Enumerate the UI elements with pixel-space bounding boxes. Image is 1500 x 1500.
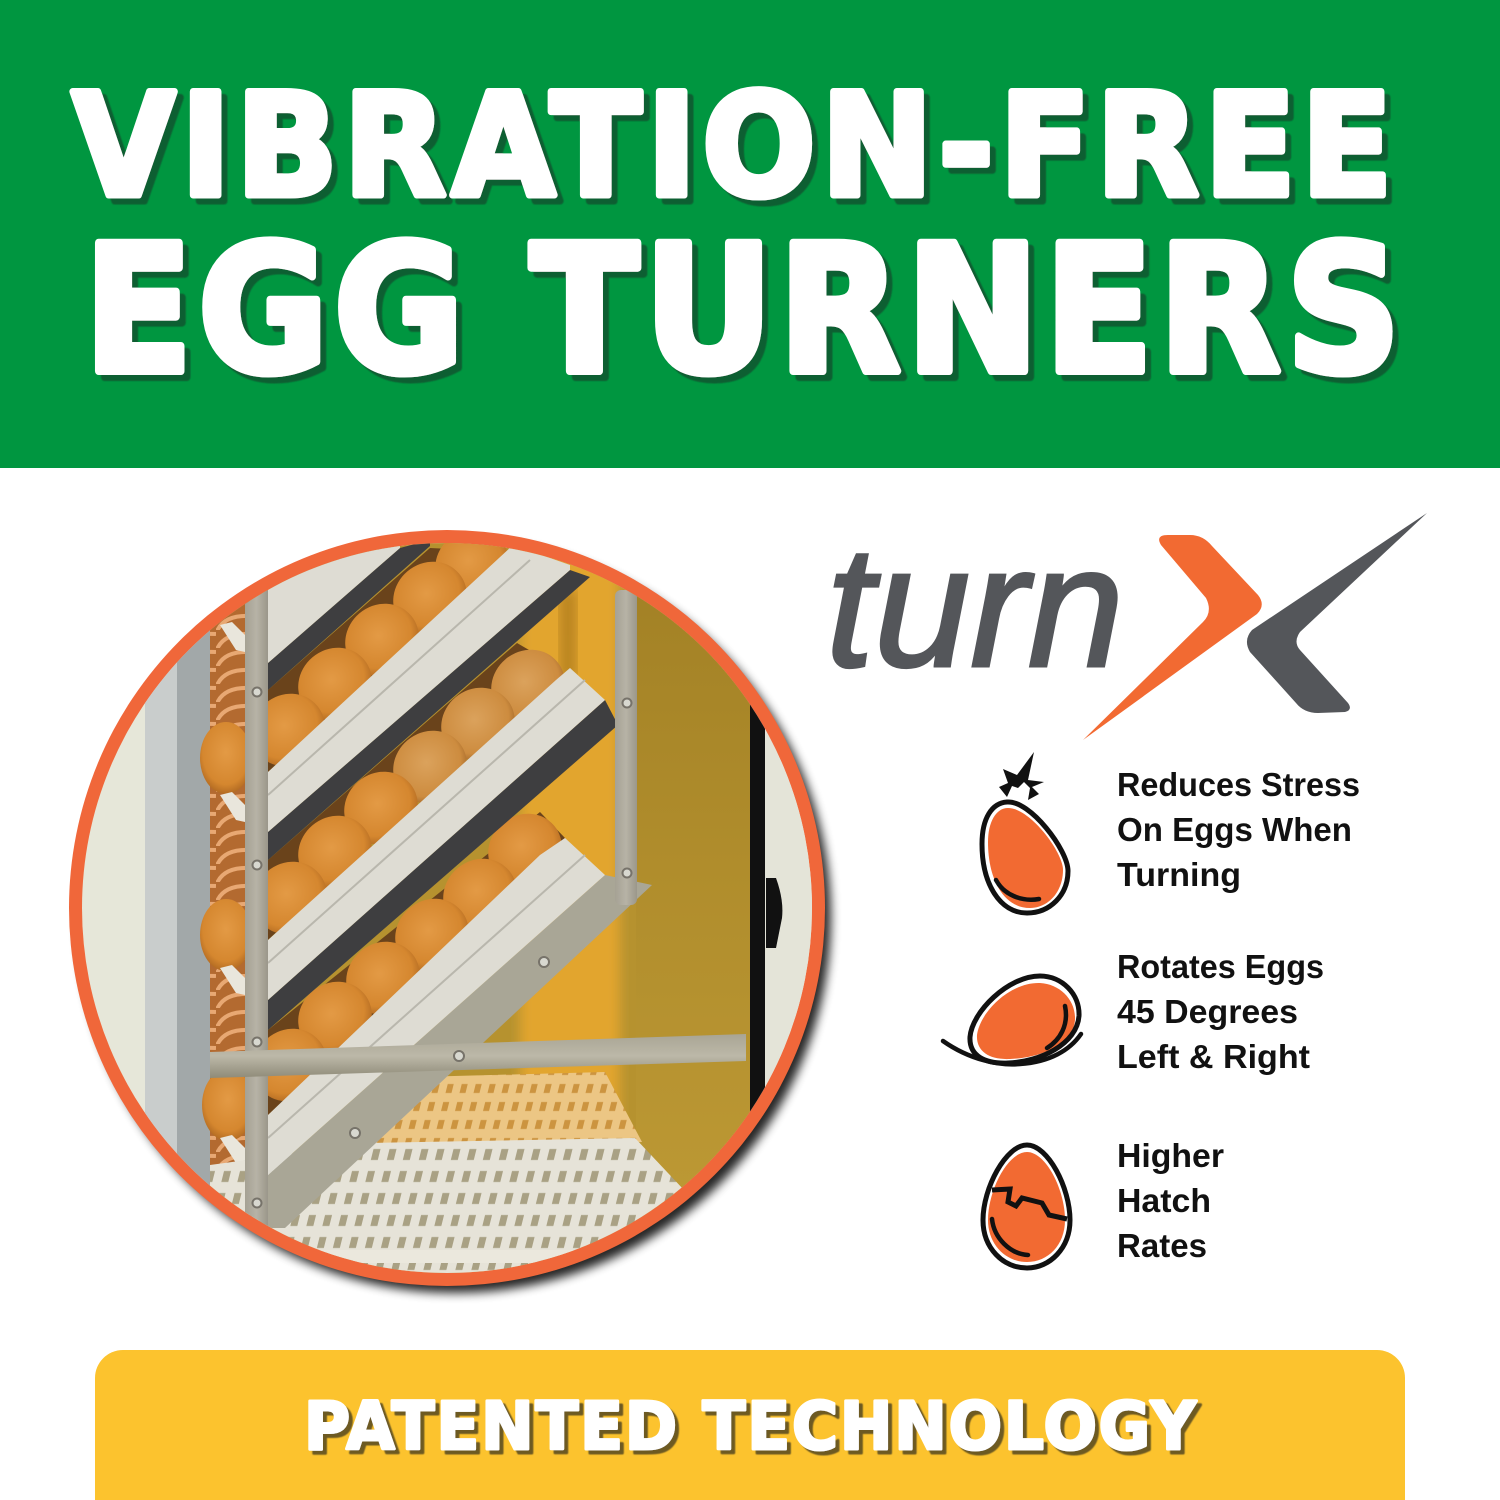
patented technology label: PATENTED TECHNOLOGY bbox=[304, 1388, 1198, 1465]
title bbox=[72, 64, 1406, 413]
benefit: higher hatch rates: Higher bbox=[1117, 1137, 1224, 1174]
yellow footer banner bbox=[95, 1350, 1405, 1500]
benefit: reduces stress: Turning bbox=[1117, 856, 1241, 893]
dark tray edges bbox=[268, 540, 618, 1030]
benefit: rotates eggs bbox=[1117, 948, 1324, 1075]
benefit: rotates eggs: Left & Right bbox=[1117, 1038, 1310, 1075]
benefit: higher hatch rates bbox=[1117, 1137, 1224, 1264]
title: VIBRATION-FREE bbox=[72, 64, 1398, 229]
circular photo of egg turner bbox=[69, 514, 835, 1293]
green title banner bbox=[0, 0, 1500, 468]
icon: stressed egg bbox=[982, 752, 1068, 913]
white trays bbox=[268, 525, 605, 1175]
turnX logo bbox=[826, 511, 1427, 740]
icon: hatching egg bbox=[983, 1145, 1070, 1268]
door latch bbox=[766, 878, 782, 948]
benefit: reduces stress: Reduces Stress bbox=[1117, 766, 1360, 803]
egg rows bbox=[268, 543, 507, 765]
benefit: reduces stress bbox=[1117, 766, 1360, 893]
benefit: rotates eggs: Rotates Eggs bbox=[1117, 948, 1324, 985]
icon: rotating egg bbox=[943, 976, 1081, 1064]
tray clips on left column bbox=[220, 622, 245, 1165]
benefit: rotates eggs: 45 Degrees bbox=[1117, 993, 1298, 1030]
eggs behind left column bbox=[200, 722, 245, 1140]
turnX logo: turn bbox=[826, 511, 1124, 703]
benefit: higher hatch rates: Rates bbox=[1117, 1227, 1207, 1264]
lower racks bbox=[376, 1072, 642, 1143]
benefit: higher hatch rates: Hatch bbox=[1117, 1182, 1211, 1219]
dark egg row backings bbox=[268, 548, 441, 772]
struts and cross bar bbox=[210, 590, 746, 1230]
angled strut bbox=[268, 875, 652, 1228]
benefit: reduces stress: On Eggs When bbox=[1117, 811, 1352, 848]
screws bbox=[252, 688, 632, 1208]
